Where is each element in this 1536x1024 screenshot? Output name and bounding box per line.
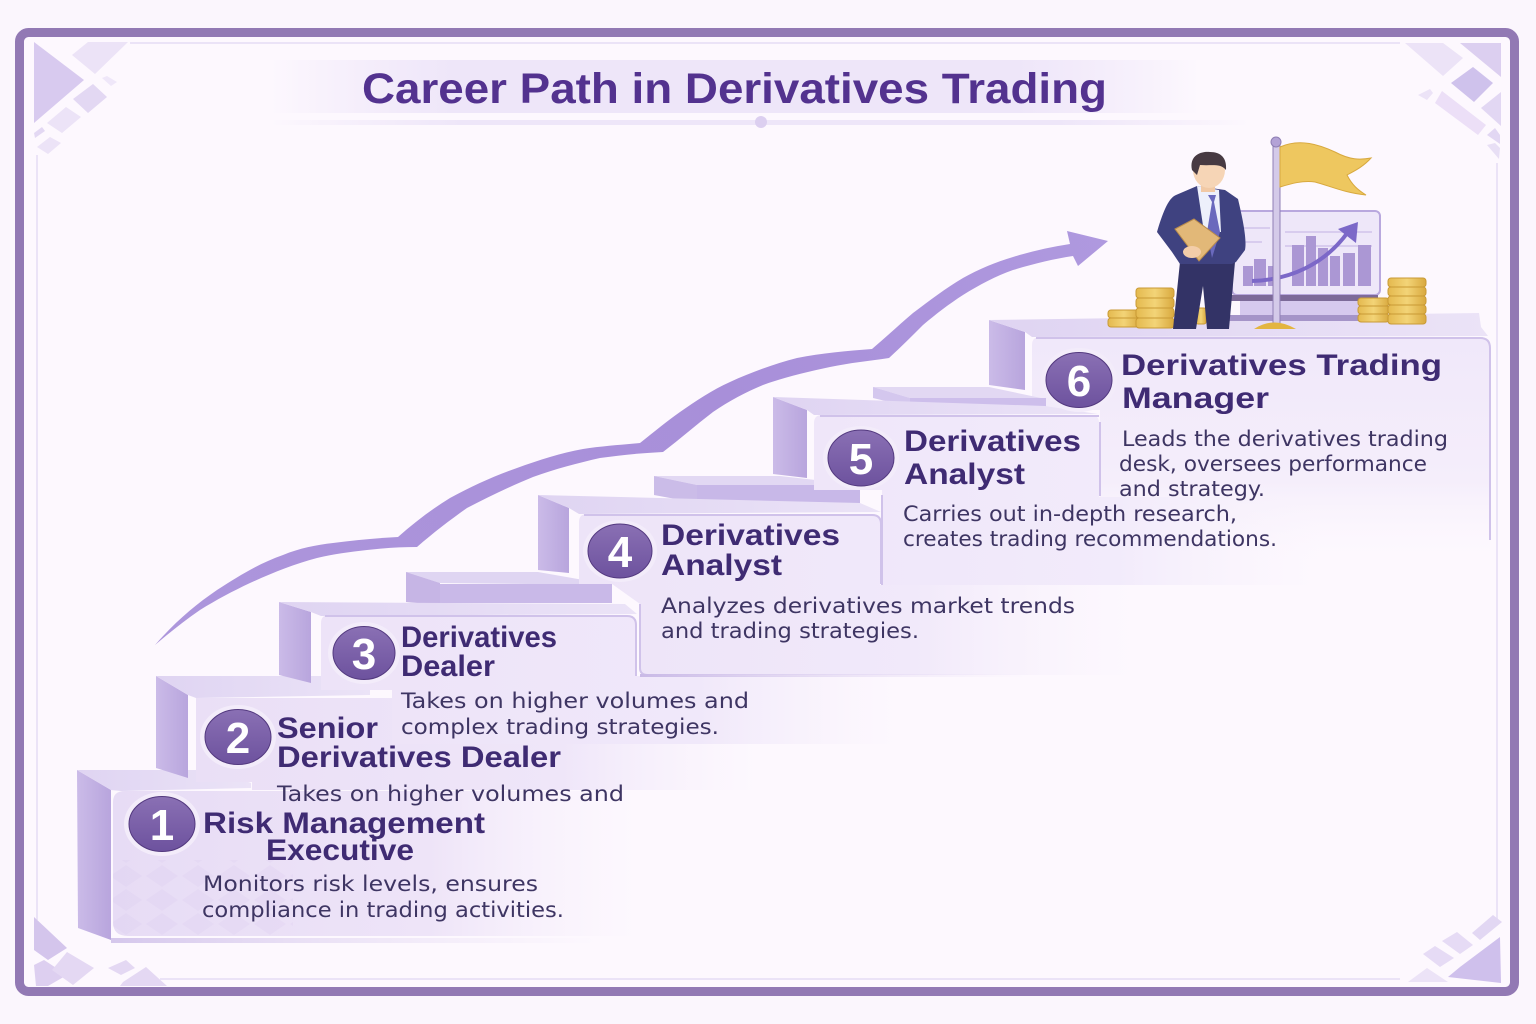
corner ornament: top left [34, 42, 128, 154]
step 6 tread [989, 313, 1488, 337]
step 5 connecting ledge [873, 387, 1046, 407]
step 4 heading: Analyst [661, 549, 782, 582]
step 2 heading: Senior [277, 712, 378, 745]
step 1 description: Monitors risk levels, ensures [203, 872, 538, 896]
step 3 block side [279, 602, 311, 683]
corner ornament: bottom left [34, 917, 167, 986]
step 6 description: and strategy. [1119, 477, 1265, 501]
neck [1201, 178, 1215, 192]
step 2 [156, 676, 760, 806]
illustration: coin stacks [1108, 278, 1426, 328]
step 2 heading [277, 712, 561, 774]
step 5 heading: Derivatives [904, 425, 1081, 458]
step 4 description: and trading strategies. [661, 619, 919, 643]
illustration: businessman [1157, 152, 1246, 329]
step 6 heading: Manager [1122, 382, 1269, 415]
step 4 connecting ledge [654, 476, 860, 503]
step 3 heading: Derivatives [401, 621, 557, 654]
step 1 heading: Executive [266, 834, 414, 867]
step 1 description: compliance in trading activities. [202, 898, 564, 922]
badge 5: 5 [849, 435, 873, 484]
step 4 [538, 476, 1140, 677]
step 5 description: Carries out in-depth research, [903, 502, 1237, 526]
step 3 panel [321, 615, 900, 744]
badge 5 [823, 426, 899, 490]
step 1 heading: Risk Management [203, 807, 485, 840]
step 5 block side [773, 397, 807, 478]
tie [1207, 195, 1220, 258]
step 4 panel [579, 514, 1140, 675]
step 1 panel texture [113, 860, 293, 936]
step 3 tread [279, 602, 637, 616]
badge 2: 2 [226, 714, 250, 763]
step 2 heading: Derivatives Dealer [277, 741, 561, 774]
step 3 description: complex trading strategies. [401, 715, 719, 739]
step 1 block side [77, 770, 111, 940]
head [1193, 152, 1225, 188]
step 3 heading [401, 621, 557, 683]
legs [1173, 262, 1235, 329]
badge 2 [200, 705, 276, 769]
shirt [1197, 186, 1221, 232]
badge 6 [1041, 348, 1117, 412]
step 4 description: Analyzes derivatives market trends [661, 594, 1075, 618]
step 4 block side [538, 495, 569, 573]
step 6 description [1119, 427, 1448, 501]
step 6 panel border [1036, 338, 1490, 540]
badge 4 [583, 520, 657, 582]
step 4 description [661, 594, 1075, 643]
step 1 description [202, 872, 564, 922]
step 6 [989, 313, 1490, 540]
step 5 tread [773, 397, 1098, 415]
step 6 heading [1121, 349, 1442, 415]
step 3 connecting ledge [406, 572, 612, 605]
jacket [1157, 186, 1246, 264]
step 1 heading [203, 807, 485, 867]
title banner [270, 60, 1250, 128]
badge 4: 4 [608, 528, 633, 577]
illustration: laptop with rising chart [1227, 211, 1380, 321]
step 5 description: creates trading recommendations. [903, 527, 1277, 551]
step 2 description: Takes on higher volumes and [276, 782, 624, 806]
step 5 heading: Analyst [904, 458, 1025, 491]
step 5 heading [904, 425, 1081, 491]
step 5 panel [814, 415, 1320, 585]
rising arrow [155, 231, 1108, 645]
step 3 description [400, 689, 749, 739]
hand [1183, 246, 1201, 258]
badge 3 [328, 622, 400, 684]
folder [1175, 219, 1220, 261]
corner ornament: bottom right [1408, 915, 1502, 983]
step 4 tread [538, 495, 881, 514]
step 1 panel [113, 791, 640, 936]
badge 6: 6 [1067, 357, 1091, 406]
step 2 tread [156, 676, 370, 698]
step 1 tread [77, 770, 251, 791]
step 2 block side [156, 676, 188, 778]
hair [1191, 152, 1226, 175]
step 5 description [903, 502, 1277, 551]
illustration: flag on pole [1254, 137, 1371, 329]
title: Career Path in Derivatives Trading [362, 65, 1107, 113]
step 6 block side [989, 320, 1025, 390]
badge 1: 1 [150, 801, 174, 850]
step 6 panel base [1032, 337, 1490, 560]
step 5 [773, 387, 1320, 585]
step 2 panel [196, 698, 760, 790]
step 1 [77, 770, 640, 943]
badge 3: 3 [352, 630, 376, 679]
badge 1 [124, 792, 200, 856]
corner ornament: top right [1405, 43, 1501, 159]
step 6 description: Leads the derivatives trading [1122, 427, 1448, 451]
step 3 description: Takes on higher volumes and [400, 689, 749, 713]
step 6 description: desk, oversees performance [1119, 452, 1427, 476]
step 4 heading [661, 519, 840, 582]
step 3 [279, 572, 900, 744]
step 3 heading: Dealer [401, 650, 495, 683]
step 4 heading: Derivatives [661, 519, 840, 552]
step 6 heading: Derivatives Trading [1121, 349, 1442, 382]
